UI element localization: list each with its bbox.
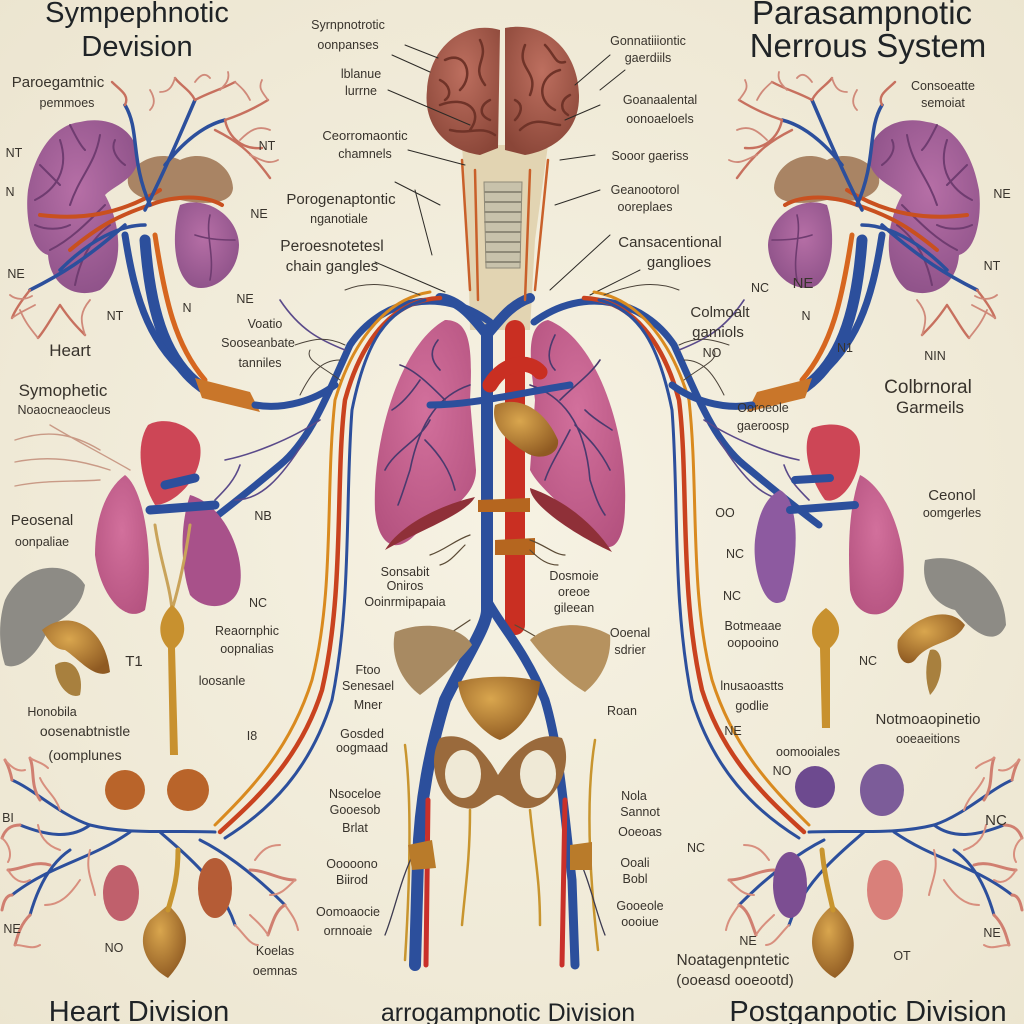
center labels: Sannot bbox=[620, 805, 660, 819]
right labels: godlie bbox=[735, 699, 769, 713]
footer headings bbox=[49, 996, 1007, 1024]
right labels: OT bbox=[893, 949, 911, 963]
left labels: NT bbox=[6, 146, 23, 160]
heart bbox=[430, 364, 570, 457]
title: sympathetic division bbox=[45, 0, 229, 63]
center labels: gaerdiils bbox=[625, 51, 671, 65]
left labels: Heart bbox=[49, 341, 91, 360]
left labels: oonpaliae bbox=[15, 535, 69, 549]
ganglia on legs bbox=[408, 840, 592, 870]
right labels: (ooeasd ooeootd) bbox=[676, 972, 794, 989]
left labels: NT bbox=[107, 309, 124, 323]
center labels: Colmoalt bbox=[690, 304, 750, 321]
right labels: N bbox=[801, 309, 811, 323]
left labels: (oomplunes bbox=[48, 747, 122, 763]
center labels: Bobl bbox=[622, 872, 648, 886]
center labels: Mner bbox=[354, 698, 382, 712]
leg vessels bbox=[426, 800, 565, 965]
center labels: lurrne bbox=[345, 84, 377, 98]
central body diagram bbox=[375, 27, 640, 965]
center labels: Gooeole bbox=[616, 899, 664, 913]
bottom left organs bbox=[103, 769, 232, 978]
right labels: oopooino bbox=[727, 636, 779, 650]
left labels: I8 bbox=[247, 729, 257, 743]
ganglia knots bbox=[478, 498, 535, 555]
arch bbox=[440, 298, 530, 335]
right labels: Notmoaopinetio bbox=[875, 711, 981, 728]
right labels: OO bbox=[715, 506, 735, 520]
left labels: Reaornphic bbox=[215, 624, 279, 638]
center labels: Ooenal bbox=[610, 626, 650, 640]
center labels: Ftoo bbox=[355, 663, 381, 677]
leader lines bbox=[375, 45, 640, 295]
center labels: Ceorromaontic bbox=[322, 128, 408, 143]
right labels: NC bbox=[859, 654, 877, 668]
red aorta bbox=[505, 330, 525, 625]
left labels: oosenabtnistle bbox=[40, 723, 130, 739]
left labels: NC bbox=[249, 596, 267, 610]
center labels: Dosmoie bbox=[549, 569, 599, 583]
abdominal sketch branches bbox=[425, 535, 575, 655]
title: parasympathetic nervous system: Nerrous System bbox=[750, 27, 986, 64]
left labels: loosanle bbox=[199, 674, 245, 688]
right long nerves bbox=[534, 285, 1022, 947]
center labels: Gosded bbox=[340, 727, 384, 741]
right labels: NE bbox=[983, 926, 1001, 940]
left long nerves bbox=[2, 285, 490, 947]
center labels: Oomoaocie bbox=[316, 905, 380, 919]
center labels: chamnels bbox=[338, 147, 392, 161]
center labels: Brlat bbox=[342, 821, 368, 835]
right labels: Botmeaae bbox=[725, 619, 782, 633]
center labels bbox=[280, 18, 769, 938]
center labels: Gooesob bbox=[330, 803, 380, 817]
left labels: T1 bbox=[125, 653, 143, 670]
bladder bbox=[458, 677, 540, 740]
center labels: Syrnpnotrotic bbox=[311, 18, 385, 32]
left labels: NT bbox=[259, 139, 276, 153]
right labels: NIN bbox=[924, 349, 946, 363]
brain bbox=[427, 27, 579, 155]
center labels: ornnoaie bbox=[324, 924, 372, 938]
right labels: NE bbox=[739, 934, 757, 948]
right labels: Noatagenpntetic bbox=[677, 952, 790, 969]
left labels bbox=[2, 74, 297, 978]
left labels: Voatio bbox=[248, 317, 282, 331]
center labels: Geanootorol bbox=[611, 183, 679, 197]
left labels: Paroegamtnic bbox=[12, 74, 105, 91]
center labels: gileean bbox=[554, 601, 594, 615]
center labels: Ooali bbox=[620, 856, 650, 870]
right labels: semoiat bbox=[921, 96, 965, 110]
right labels: NC bbox=[687, 841, 705, 855]
center labels: oonpanses bbox=[317, 38, 379, 52]
right labels: gaeroosp bbox=[737, 419, 789, 433]
right labels: NC bbox=[985, 812, 1007, 829]
left labels: NE bbox=[236, 292, 254, 306]
center labels: NO bbox=[703, 346, 722, 360]
left labels: Honobila bbox=[27, 705, 77, 719]
left labels: Peosenal bbox=[11, 512, 73, 529]
top right kidney organs bbox=[672, 72, 997, 412]
right labels: NO bbox=[773, 764, 792, 778]
center labels: Sooor gaeriss bbox=[611, 149, 689, 163]
left labels: N bbox=[5, 185, 15, 199]
center labels: gamiols bbox=[692, 324, 744, 341]
center labels: Oniros bbox=[387, 579, 423, 593]
center labels: Ooeoas bbox=[618, 825, 662, 839]
right labels: lnusaoastts bbox=[720, 679, 784, 693]
left labels: pemmoes bbox=[40, 96, 94, 110]
right labels: NE bbox=[793, 275, 813, 292]
right labels: NE bbox=[993, 187, 1011, 201]
center labels: ganglioes bbox=[647, 254, 711, 271]
right lung bbox=[530, 320, 625, 547]
center labels: Nsoceloe bbox=[329, 787, 381, 801]
blue main trunk bbox=[415, 330, 487, 965]
center labels: Nola bbox=[621, 789, 647, 803]
center labels: Biirod bbox=[336, 873, 368, 887]
center labels: nganotiale bbox=[310, 212, 368, 226]
center labels: ooreplaes bbox=[618, 200, 672, 214]
center labels: Ooooono bbox=[326, 857, 378, 871]
right labels: Consoeatte bbox=[911, 79, 975, 93]
right labels: NC bbox=[726, 547, 744, 561]
center labels: Gonnatiiiontic bbox=[610, 34, 686, 48]
center labels: Ooinrmipapaia bbox=[364, 595, 446, 609]
title: sympathetic division: Devision bbox=[81, 31, 193, 63]
right labels: ooeaeitions bbox=[896, 732, 960, 746]
left labels: BI bbox=[2, 811, 14, 825]
left labels: NE bbox=[3, 922, 21, 936]
left labels: Noaocneaocleus bbox=[17, 403, 111, 417]
faint sketch marks bbox=[15, 425, 130, 486]
right labels bbox=[676, 79, 1011, 989]
left labels: N bbox=[182, 301, 192, 315]
right labels: oomooiales bbox=[776, 745, 840, 759]
right labels: Garmeils bbox=[896, 398, 964, 417]
center labels: lblanue bbox=[341, 67, 381, 81]
left labels: oemnas bbox=[253, 964, 297, 978]
right labels: NE bbox=[724, 724, 742, 738]
left labels: oopnalias bbox=[220, 642, 274, 656]
center labels: oooiue bbox=[621, 915, 659, 929]
center labels: Peroesnotetesl bbox=[280, 238, 384, 255]
neck and spinal column bbox=[462, 145, 548, 330]
right labels: NT bbox=[984, 259, 1001, 273]
right labels: N1 bbox=[837, 341, 853, 355]
lung inner cavities bbox=[385, 488, 612, 552]
right labels: Colbrnoral bbox=[884, 377, 972, 398]
spinal lines bbox=[462, 160, 548, 300]
left labels: NE bbox=[250, 207, 268, 221]
bottom right organs bbox=[773, 764, 904, 978]
right labels: Ooroeole bbox=[737, 401, 789, 415]
pelvic wings bbox=[394, 626, 472, 695]
center labels: oogmaad bbox=[336, 741, 388, 755]
right labels: oomgerles bbox=[923, 506, 981, 520]
center labels: NC bbox=[751, 281, 769, 295]
center labels: Cansacentional bbox=[618, 234, 722, 251]
center labels: Roan bbox=[607, 704, 637, 718]
pelvis bbox=[434, 736, 566, 809]
right labels: NC bbox=[723, 589, 741, 603]
right labels: Ceonol bbox=[928, 487, 976, 504]
middle right organs bbox=[755, 424, 1006, 728]
center labels: chain gangles bbox=[286, 258, 378, 275]
left labels: NB bbox=[254, 509, 272, 523]
center labels: sdrier bbox=[614, 643, 646, 657]
left labels: NE bbox=[7, 267, 25, 281]
left labels: Symophetic bbox=[19, 381, 108, 400]
center labels: Porogenaptontic bbox=[286, 191, 396, 208]
left lung bbox=[375, 320, 476, 545]
center labels: Sonsabit bbox=[381, 565, 430, 579]
left labels: Sooseanbate bbox=[221, 336, 295, 350]
middle left organs bbox=[0, 421, 241, 755]
top left kidney organs bbox=[10, 72, 335, 412]
bronchial branches bbox=[385, 335, 612, 515]
center labels: Goanaalental bbox=[623, 93, 697, 107]
center labels: oonoaeloels bbox=[626, 112, 694, 126]
left labels: Koelas bbox=[256, 944, 294, 958]
title: parasympathetic nervous system bbox=[750, 0, 986, 64]
trachea bbox=[484, 182, 522, 268]
left labels: NO bbox=[105, 941, 124, 955]
left labels: tanniles bbox=[238, 356, 282, 370]
center labels: oreoe bbox=[558, 585, 590, 599]
center labels: Senesael bbox=[342, 679, 394, 693]
